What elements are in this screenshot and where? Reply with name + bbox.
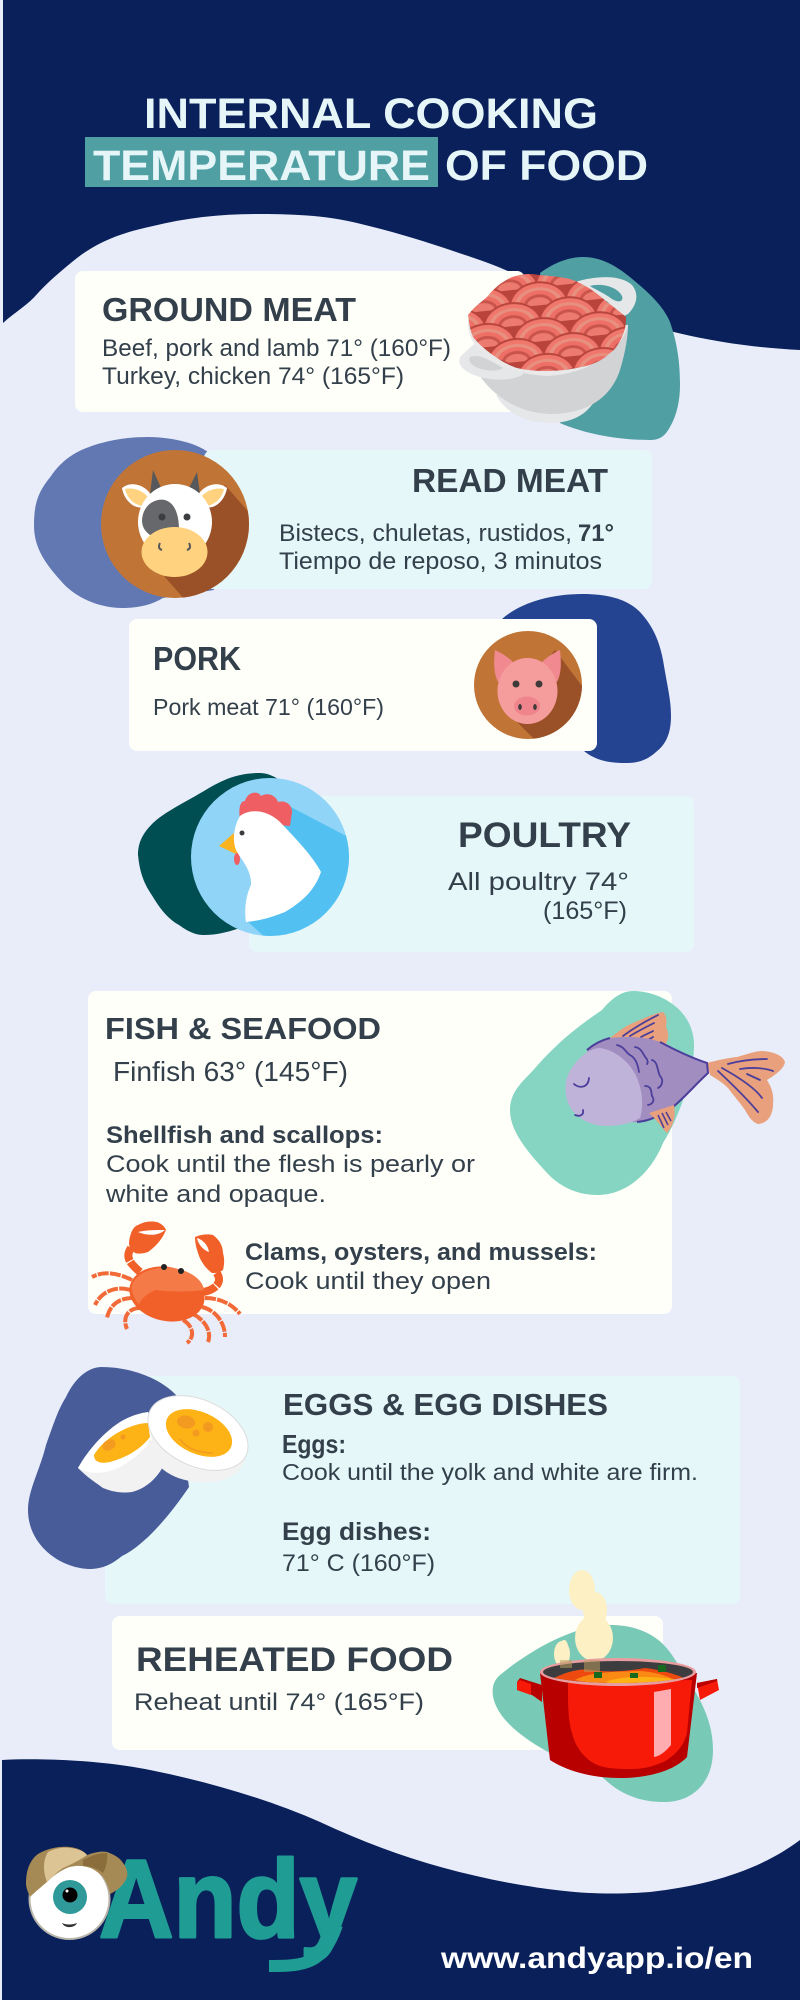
text: Bistecs, chuletas, rustidos, [279, 520, 572, 547]
blob [540, 257, 680, 440]
card [105, 1376, 740, 1604]
text: Shellfish and scallops: [106, 1122, 383, 1149]
logo [26, 1838, 357, 1966]
panel: ground meat [75, 257, 680, 440]
icon: crab [92, 1221, 240, 1343]
icon: chicken [191, 778, 350, 940]
blob [34, 437, 214, 608]
panel: fish and seafood [88, 991, 785, 1343]
heading: GROUND MEAT [102, 291, 356, 328]
text: 71° C (160°F) [282, 1550, 435, 1577]
title [85, 90, 648, 190]
icon: boiled eggs [78, 1381, 260, 1493]
icon: pig [474, 631, 585, 745]
panel: reheated food [112, 1570, 719, 1802]
text: Cook until the yolk and white are firm. [282, 1459, 698, 1485]
bottom navy wave [2, 1759, 800, 2000]
card [88, 991, 672, 1314]
text: Pork meat 71° (160°F) [153, 694, 384, 720]
heading: READ MEAT [412, 462, 608, 499]
card [204, 450, 652, 589]
icon: cow [101, 450, 260, 600]
title word highlighted: TEMPERATURE [93, 142, 430, 190]
blob [493, 1625, 713, 1802]
logo mascot [26, 1847, 127, 1939]
heading: FISH & SEAFOOD [105, 1011, 381, 1046]
title line 2 end: OF FOOD [445, 142, 648, 190]
website url: www.andyapp.io/en [440, 1942, 753, 1975]
text: All poultry 74° [448, 868, 629, 896]
icon: bowl of ground meat [459, 274, 636, 423]
card [249, 796, 694, 952]
heading: REHEATED FOOD [136, 1641, 453, 1679]
card [75, 271, 525, 412]
heading: PORK [153, 640, 241, 677]
blob [138, 773, 300, 935]
heading: EGGS & EGG DISHES [283, 1387, 608, 1422]
logo wordmark: Andy [99, 1838, 357, 1961]
heading: POULTRY [458, 816, 631, 855]
text: white and opaque. [105, 1181, 326, 1208]
text: Cook until the flesh is pearly or [106, 1151, 475, 1178]
card [112, 1616, 663, 1750]
text: Tiempo de reposo, 3 minutos [279, 548, 602, 575]
panel: poultry [138, 773, 694, 952]
text: Reheat until 74° (165°F) [134, 1689, 424, 1716]
icon: steaming pot [517, 1570, 719, 1778]
logo wordmark tail [269, 1925, 337, 1966]
text: (165°F) [543, 897, 627, 925]
title highlight [85, 137, 438, 187]
blob [502, 594, 671, 763]
icon: fish [566, 1012, 785, 1133]
text: Cook until they open [245, 1268, 491, 1295]
blob [510, 991, 694, 1195]
text: Clams, oysters, and mussels: [245, 1239, 597, 1266]
top navy wave [3, 0, 800, 350]
text: Beef, pork and lamb 71° (160°F) [102, 335, 451, 362]
panel: read meat [34, 437, 652, 608]
text: Finfish 63° (145°F) [113, 1056, 348, 1087]
blob [28, 1367, 189, 1569]
text: temperature: 71° [578, 520, 614, 547]
text: Egg dishes: [282, 1518, 431, 1546]
text: Turkey, chicken 74° (165°F) [102, 363, 404, 390]
card [129, 619, 597, 751]
text: Eggs: [282, 1429, 346, 1459]
panel: eggs [28, 1367, 740, 1604]
title line 1: INTERNAL COOKING [144, 90, 598, 138]
panel: pork [129, 594, 671, 763]
